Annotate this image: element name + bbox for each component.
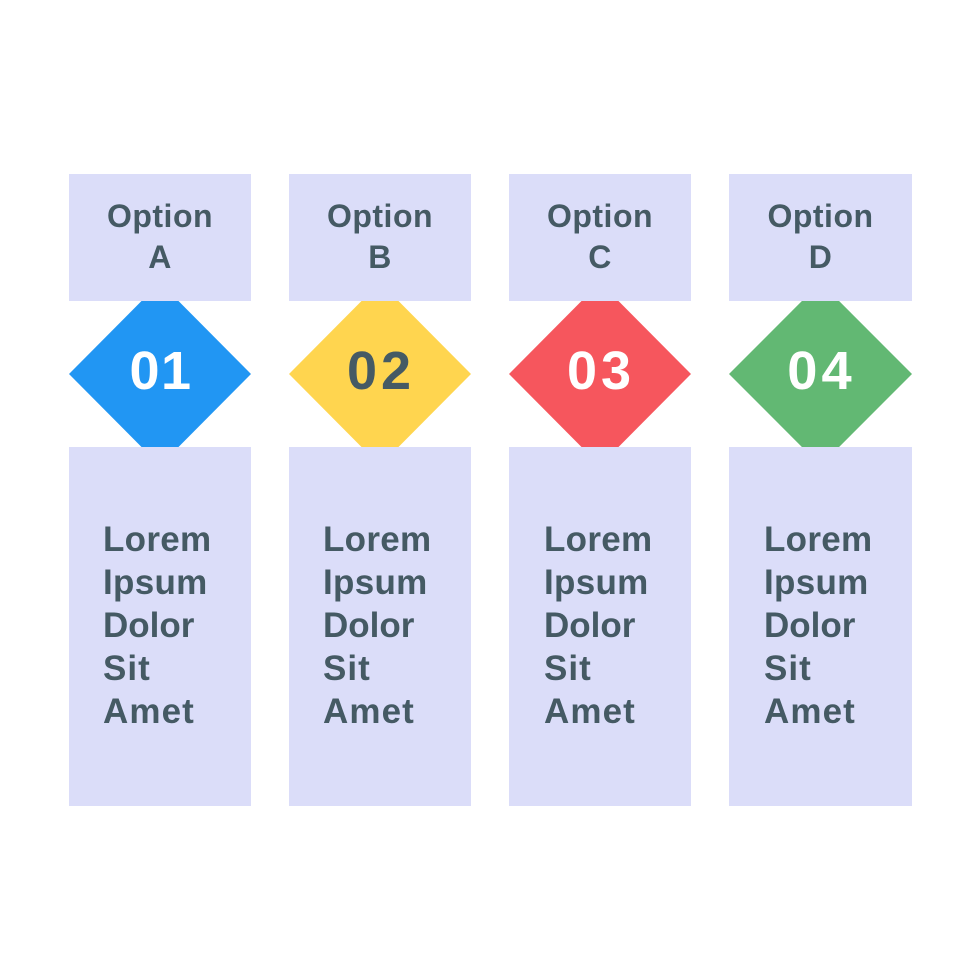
text panel: option D: Lorem bbox=[764, 520, 872, 559]
text panel: option A: Lorem bbox=[103, 520, 211, 559]
text panel: option C: Sit bbox=[544, 649, 592, 688]
header panel: option B: B bbox=[368, 239, 392, 275]
header panel: option C: Option bbox=[547, 198, 653, 234]
diamond badge 01: 01 bbox=[129, 341, 193, 401]
diamond badge 02 bbox=[289, 301, 471, 447]
header panel: option B bbox=[289, 174, 471, 301]
text panel: option A: Amet bbox=[103, 692, 195, 731]
diamond badge 04: 04 bbox=[787, 341, 856, 401]
text panel: option D: Sit bbox=[764, 649, 812, 688]
column: option C bbox=[509, 174, 691, 806]
header panel: option D: D bbox=[809, 239, 832, 275]
text panel: option D: Amet bbox=[764, 692, 856, 731]
text panel: option A: Dolor bbox=[103, 606, 194, 645]
text panel: option A bbox=[69, 447, 251, 806]
text panel: option C: Ipsum bbox=[544, 563, 649, 602]
column: option D bbox=[729, 174, 912, 806]
text panel: option D: Dolor bbox=[764, 606, 855, 645]
text panel: option B: Dolor bbox=[323, 606, 414, 645]
diamond badge 04 bbox=[729, 301, 912, 447]
header panel: option D bbox=[729, 174, 912, 301]
header panel: option C bbox=[509, 174, 691, 301]
diamond badge 02: 02 bbox=[347, 341, 415, 401]
header panel: option C: C bbox=[588, 239, 612, 275]
text panel: option C: Amet bbox=[544, 692, 636, 731]
column: option B bbox=[289, 174, 471, 806]
header panel: option B: Option bbox=[327, 198, 433, 234]
text panel: option B: Sit bbox=[323, 649, 371, 688]
text panel: option B: Ipsum bbox=[323, 563, 428, 602]
text panel: option A: Ipsum bbox=[103, 563, 208, 602]
header panel: option A: A bbox=[148, 239, 172, 275]
text panel: option C: Lorem bbox=[544, 520, 652, 559]
header panel: option A bbox=[69, 174, 251, 301]
column: option A bbox=[69, 174, 251, 806]
text panel: option D: Ipsum bbox=[764, 563, 869, 602]
diamond badge 01 bbox=[69, 301, 251, 447]
header panel: option A: Option bbox=[107, 198, 213, 234]
text panel: option C bbox=[509, 447, 691, 806]
text panel: option B: Amet bbox=[323, 692, 415, 731]
text panel: option D bbox=[729, 447, 912, 806]
diamond badge 03: 03 bbox=[567, 341, 635, 401]
text panel: option A: Sit bbox=[103, 649, 151, 688]
header panel: option D: Option bbox=[767, 198, 874, 234]
text panel: option B: Lorem bbox=[323, 520, 431, 559]
text panel: option C: Dolor bbox=[544, 606, 635, 645]
text panel: option B bbox=[289, 447, 471, 806]
diamond badge 03 bbox=[509, 301, 691, 447]
